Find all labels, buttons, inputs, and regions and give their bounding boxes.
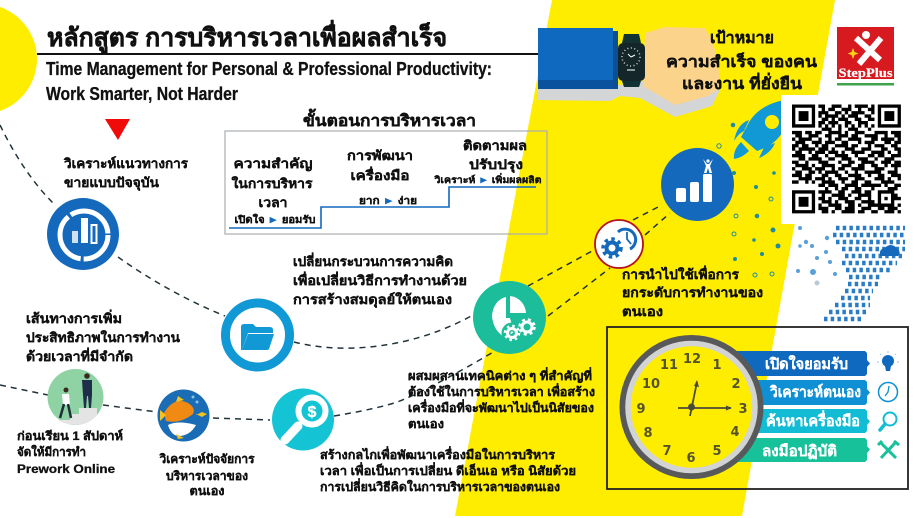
icon: tools [878,441,899,458]
icon: gear and clock badge [595,220,643,268]
action bar: find tools [730,409,870,433]
dashed path connecting steps [0,125,670,420]
text: combine techniques: เครื่องมือที่จะพัฒนาไปเป็นนิสัยของ [408,399,594,415]
text: build mechanism: การเปลี่ยนวิธีคิดในการบริหารเวลาของตนเอง [320,478,560,494]
text: analyse current approach [63,156,188,191]
text: prework: Prework Online [17,462,115,476]
text: prework: จัดให้มีการทำ [17,444,86,459]
step 3 text [434,138,542,186]
text: build mechanism: สร้างกลไกเพื่อพัฒนาเครื่องมือในการบริหาร [320,446,556,462]
clock: 8 [643,426,653,441]
text: analyse current approach: ขายแบบปัจจุบัน [64,175,159,191]
text: goal [666,29,817,93]
text: goal: เป้าหมาย [710,29,774,47]
icon: clock [878,382,898,402]
text: goal: และงาน ที่ยั่งยืน [682,72,802,93]
StepPlus logo: StepPlus [838,66,893,80]
text: prework: ก่อนเรียน 1 สัปดาห์ [17,429,123,443]
icon: magnifier dollar badge [272,388,334,450]
text: apply to raise performance: ยกระดับการทำงานของ [622,285,763,300]
action bar: find tools: ค้นหาเครื่องมือ [766,410,860,430]
heading: time management steps: ขั้นตอนการบริหารเวลา [303,108,476,130]
icon: magnifier dollar badge: $ [308,404,317,421]
StepPlus logo [837,27,894,86]
text: build mechanism: เวลา เพื่อเป็นการเปลี่ยน ดีเอ็นเอ หรือ นิสัยด้วย [320,462,576,478]
clock: 1 [712,358,722,373]
text: build mechanism [320,446,576,494]
text: route to productivity: เส้นทางการเพิ่ม [26,309,122,326]
clock: 5 [712,444,722,459]
clock: 3 [738,402,748,417]
icon cluster head [796,226,905,319]
clock: 7 [662,444,672,459]
text: apply to raise performance [622,265,763,319]
step 2 text: การพัฒนา [347,148,413,163]
subtitle: Work Smarter, Not Harder [46,84,238,104]
action bar: self analysis: วิเคราะห์ตนเอง [769,383,861,401]
action bar: take action [730,438,870,462]
step 1 text: เวลา [258,195,288,210]
step 1 text: ในการบริหาร [232,175,313,191]
text: analyse factors: ตนเอง [190,484,225,498]
text: combine techniques [408,367,595,431]
step 2 text: ยาก ► ง่าย [359,195,417,207]
icon: red triangle marker [105,119,130,140]
step 2 text [347,148,417,207]
text: goal: ความสำเร็จ ของคน [666,51,817,71]
yellow diagonal background [455,0,835,516]
icon: magnifier [880,412,896,430]
icon: pie and gears badge [473,281,546,354]
clock: 10 [642,377,660,392]
clock: 6 [686,451,696,466]
text: change mindset: การสร้างสมดุลย์ให้ตนเอง [293,291,452,308]
icon: folder badge [226,303,290,367]
text: change mindset: เปลี่ยนกระบวนการความคิด [293,252,453,269]
icon: fish badge [158,390,210,442]
icon: rocket [734,100,792,159]
clock: 11 [660,358,678,373]
title: หลักสูตร การบริหารเวลาเพื่อผลสำเร็จ [47,20,447,54]
panel: clock and actions [607,327,908,489]
text: route to productivity [26,309,180,364]
step 2 text: เครื่องมือ [350,166,410,183]
step 1 text [232,156,316,226]
icon: hand with watch [538,27,720,117]
text: analyse factors: วิเคราะห์ปัจจัยการ [159,452,255,466]
text: route to productivity: ประสิทธิภาพในการทำงาน [26,329,180,345]
text: apply to raise performance: การนำไปใช้เพื่อการ [622,265,739,282]
icon: light bulb [877,351,899,371]
action bar: open mind [730,351,870,376]
action bar: open mind: เปิดใจยอมรับ [765,355,848,373]
yellow corner circle [0,4,37,114]
title underline [37,53,539,55]
clock: 9 [636,402,646,417]
action bar: take action: ลงมือปฏิบัติ [762,442,837,460]
step 3 text: ปรับปรุง [469,157,523,173]
text: combine techniques: ต้องใช้ในการบริหารเวลา เพื่อสร้าง [408,383,595,399]
clock: 12 [683,352,701,367]
icon: people on stairs [48,369,104,425]
panel: staircase steps [225,131,547,234]
small scattered icons on yellow [717,123,780,277]
clock: 4 [730,425,740,440]
step 1 text: ความสำคัญ [234,156,312,172]
clock: 2 [731,377,741,392]
text: analyse factors: บริหารเวลาของ [166,469,248,483]
clock [622,338,760,476]
action bar: self analysis [730,380,870,405]
text: prework [17,429,123,476]
step 1 text: เปิดใจ ► ยอมรับ [234,213,316,226]
text: change mindset [293,252,467,308]
subtitle [46,59,492,104]
text: route to productivity: ด้วยเวลาที่มีจำกัด [26,347,133,364]
subtitle: Time Management for Personal & Professional Productivity: [46,59,492,79]
step 3 text: วิเคราะห์ ► เพิ่มผลผลิต [434,172,542,186]
text: analyse factors [159,452,255,498]
icon: growth chart badge [661,148,734,221]
step 3 text: ติดตามผล [463,138,527,153]
text: apply to raise performance: ตนเอง [622,304,663,319]
text: analyse current approach: วิเคราะห์แนวทางการ [63,156,188,171]
text: change mindset: เพื่อเปลี่ยนวิธีการทำงานด้วย [293,271,467,288]
text: combine techniques: ตนเอง [408,417,444,431]
icon: bar chart badge [47,198,119,270]
QR code [781,95,920,224]
text: combine techniques: ผสมผสานเทคนิคต่าง ๆ ที่สำคัญที่ [408,367,592,383]
